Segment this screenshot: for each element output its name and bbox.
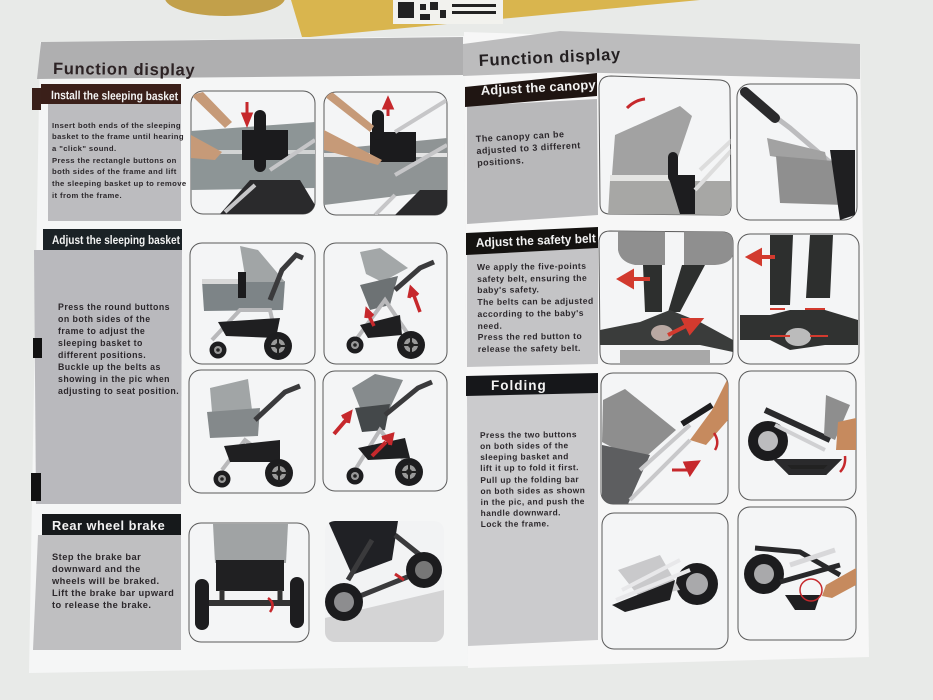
text: safety belt: according to the baby's <box>477 308 584 319</box>
photo: harness unbuckled <box>738 234 859 364</box>
section: rear wheel brake heading <box>42 514 181 535</box>
photo: side brake detail <box>325 521 444 642</box>
photo: stroller reclined <box>323 371 447 491</box>
section: install basket heading: Install the sleeping basket <box>51 88 178 103</box>
text: adjust basket: Buckle up the belts as <box>58 362 161 372</box>
section: rear wheel brake heading: Rear wheel brake <box>52 518 165 533</box>
photo: canopy close-up <box>599 76 732 216</box>
text: adjust basket: frame to adjust the <box>58 326 145 336</box>
text: folding: Press the two buttons <box>480 429 577 440</box>
text: install basket: the sleeping basket up to remove <box>52 179 187 188</box>
text: folding: in the pic, and push the <box>481 496 585 507</box>
photo: fold step one <box>601 373 728 504</box>
photo: stroller carrycot facing left <box>190 243 315 364</box>
photo: five point harness <box>599 231 733 364</box>
photo: remove basket <box>324 92 447 215</box>
text: folding: lift it up to fold it first. <box>480 462 579 473</box>
text: folding <box>480 429 588 529</box>
yellow object top left <box>165 0 285 16</box>
text: safety belt: need. <box>478 321 502 331</box>
text: adjust basket: on both sides of the <box>58 314 151 324</box>
text: adjust basket: sleeping basket to <box>58 338 143 348</box>
right page <box>464 32 869 668</box>
left page <box>29 36 468 673</box>
heading: right Function display: Function display <box>478 46 621 70</box>
left header band <box>37 37 463 79</box>
text: adjust basket: Press the round buttons <box>58 302 170 312</box>
text: folding: Pull up the folding bar <box>480 474 579 485</box>
left column panels <box>31 88 182 650</box>
section: canopy heading: Adjust the canopy <box>480 77 597 98</box>
photo: canopy folded back <box>737 84 857 220</box>
text: safety belt: The belts can be adjusted <box>477 296 594 307</box>
text: rear wheel brake: downward and the <box>52 564 141 574</box>
section: folding heading <box>466 373 598 396</box>
text: canopy: adjusted to 3 different <box>476 140 581 156</box>
text: folding: Lock the frame. <box>481 518 549 529</box>
text: canopy: positions. <box>477 155 524 168</box>
text: canopy: The canopy can be <box>476 129 565 144</box>
section: adjust basket heading <box>43 229 182 250</box>
text: folding: handle downward. <box>481 507 561 518</box>
section: safety belt heading <box>466 227 598 255</box>
text: install basket: it from the frame. <box>52 191 122 200</box>
photo: stroller with canopy <box>189 370 315 493</box>
photo: insert basket <box>191 91 315 214</box>
yellow box with QR label <box>291 0 700 37</box>
text: canopy <box>476 128 585 168</box>
text: install basket: Insert both ends of the sleeping <box>52 121 181 130</box>
text: safety belt <box>477 261 597 354</box>
text: folding: on both sides of the <box>480 440 569 451</box>
section: install basket heading <box>41 84 181 104</box>
section: folding heading: Folding <box>491 378 547 393</box>
text: rear wheel brake: wheels will be braked. <box>51 576 160 586</box>
photo: rear view brake <box>189 523 309 642</box>
photo: fold step two <box>739 371 856 500</box>
section: canopy heading <box>465 73 597 107</box>
right header band <box>463 31 860 79</box>
text: install basket: a "click" sound. <box>52 144 117 153</box>
text: adjust basket: showing in the pic when <box>58 374 170 384</box>
right column panels <box>467 99 598 646</box>
text: rear wheel brake: Step the brake bar <box>52 552 141 562</box>
section: adjust basket heading: Adjust the sleeping basket <box>52 233 180 247</box>
text: folding: on both sides as shown <box>480 485 585 496</box>
text: safety belt: release the safety belt. <box>478 343 581 354</box>
heading: left Function display: Function display <box>53 60 196 79</box>
text: safety belt: safety belt, ensuring the <box>477 273 587 284</box>
text: folding: sleeping basket and <box>480 451 569 462</box>
photo: folded stroller locked <box>738 507 856 640</box>
section: safety belt heading: Adjust the safety belt <box>476 231 597 250</box>
text: safety belt: We apply the five-points <box>477 261 586 272</box>
text: install basket: Press the rectangle buttons on <box>52 156 177 165</box>
text: adjust basket: adjusting to seat position. <box>58 386 179 396</box>
photo: stroller raised seat <box>324 243 447 364</box>
text: safety belt: baby's safety. <box>477 284 539 295</box>
text: adjust basket: different positions. <box>58 350 146 360</box>
text: install basket: basket to the frame until hearing <box>52 132 184 141</box>
text: safety belt: Press the red button to <box>478 331 582 342</box>
text: install basket: both sides of the frame and lift <box>52 167 177 176</box>
text: rear wheel brake: Lift the brake bar upward <box>52 588 174 598</box>
text: rear wheel brake: to release the brake. <box>52 600 151 610</box>
photo: folded stroller <box>602 513 728 649</box>
